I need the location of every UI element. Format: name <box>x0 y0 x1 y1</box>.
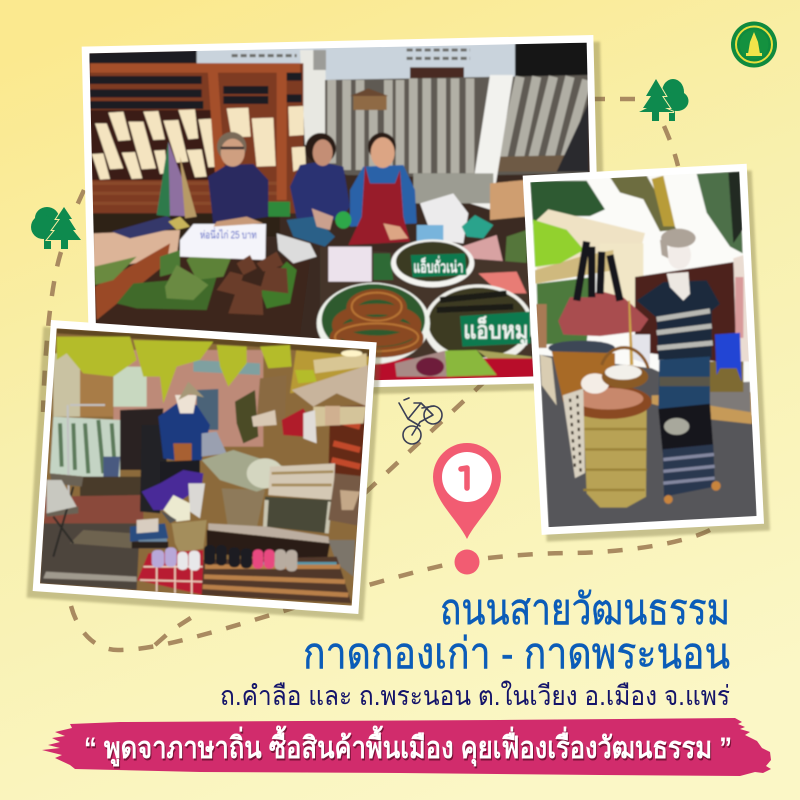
location pin with number 1 <box>433 443 501 574</box>
photo: mannequin and baskets <box>523 164 770 542</box>
title line 2: กาดกองเก่า - กาดพระนอน <box>303 630 730 678</box>
photo: food vendors: แอ็บถั่วเน่า <box>413 255 463 276</box>
dashed route <box>43 99 710 650</box>
logo <box>731 22 777 68</box>
address: ถ.คำลือ และ ถ.พระนอน ต.ในเวียง อ.เมือง จ.แพร่ <box>220 680 730 711</box>
icon: trees left <box>31 207 81 249</box>
photo: street clothes stall <box>27 320 382 621</box>
icon: trees top right <box>639 79 688 121</box>
photo: food vendors <box>82 35 608 400</box>
banner <box>42 718 771 776</box>
icon: bicycle <box>399 398 442 444</box>
photo: food vendors: ห่อนึ่งไก่ 25 บาท <box>200 227 257 241</box>
photo: food vendors: แอ็บหมู <box>463 315 528 345</box>
title line 1: ถนนสายวัฒนธรรม <box>440 586 730 634</box>
